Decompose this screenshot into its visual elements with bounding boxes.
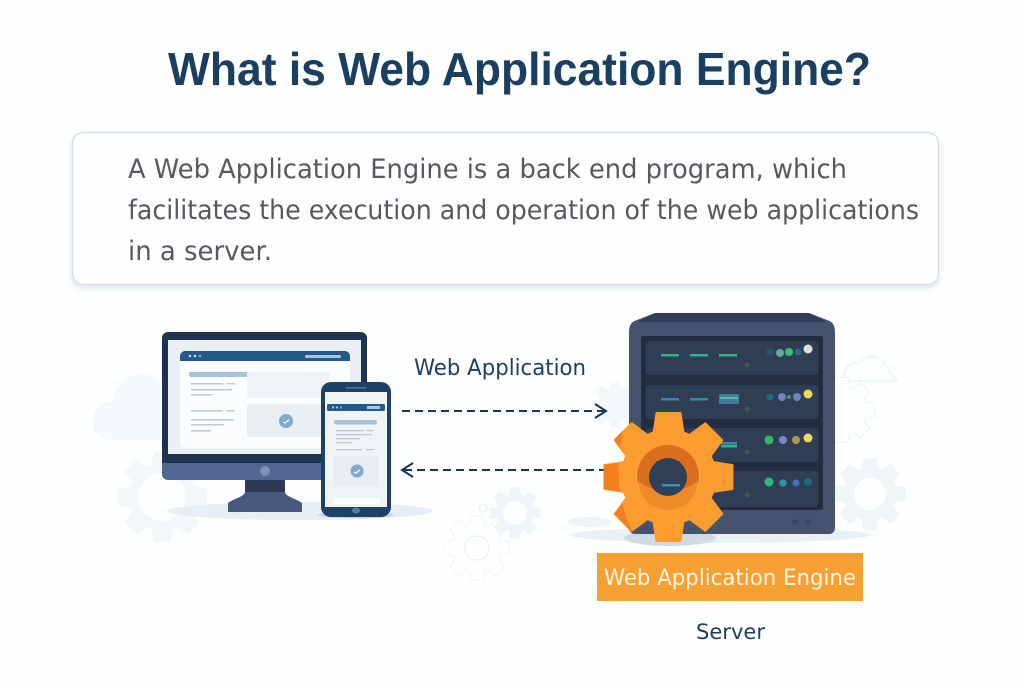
label: Server: Server — [696, 620, 765, 644]
panel: definition card — [72, 132, 938, 284]
browser window — [180, 351, 350, 448]
definition text: facilitates the execution and operation of the web applications — [128, 195, 919, 226]
ground shadow — [167, 502, 433, 520]
title: What is Web Application Engine? — [168, 43, 871, 95]
definition text: A Web Application Engine is a back end program, which — [128, 154, 847, 185]
infographic canvas — [70, 52, 941, 640]
label box: Web Application Engine — [597, 553, 863, 601]
label box: Web Application Engine: Web Application Engine — [604, 566, 856, 591]
illustration: server and engine — [568, 313, 870, 546]
icon: desktop monitor — [162, 332, 367, 512]
definition text — [128, 154, 919, 267]
icon: server rack — [629, 313, 835, 534]
icon: smartphone — [318, 382, 394, 518]
arrow: response to client — [402, 463, 604, 477]
ground shadow — [570, 527, 870, 543]
definition text: in a server. — [128, 236, 272, 267]
background decoration: cloud and gears left — [92, 374, 541, 580]
arrow: request to server — [402, 404, 606, 418]
status lights — [661, 344, 812, 525]
background decoration: cloud and gears right — [592, 357, 906, 530]
label: Web Application: Web Application — [414, 356, 586, 381]
illustration: client devices — [162, 332, 433, 520]
icon: orange gear — [588, 413, 732, 542]
